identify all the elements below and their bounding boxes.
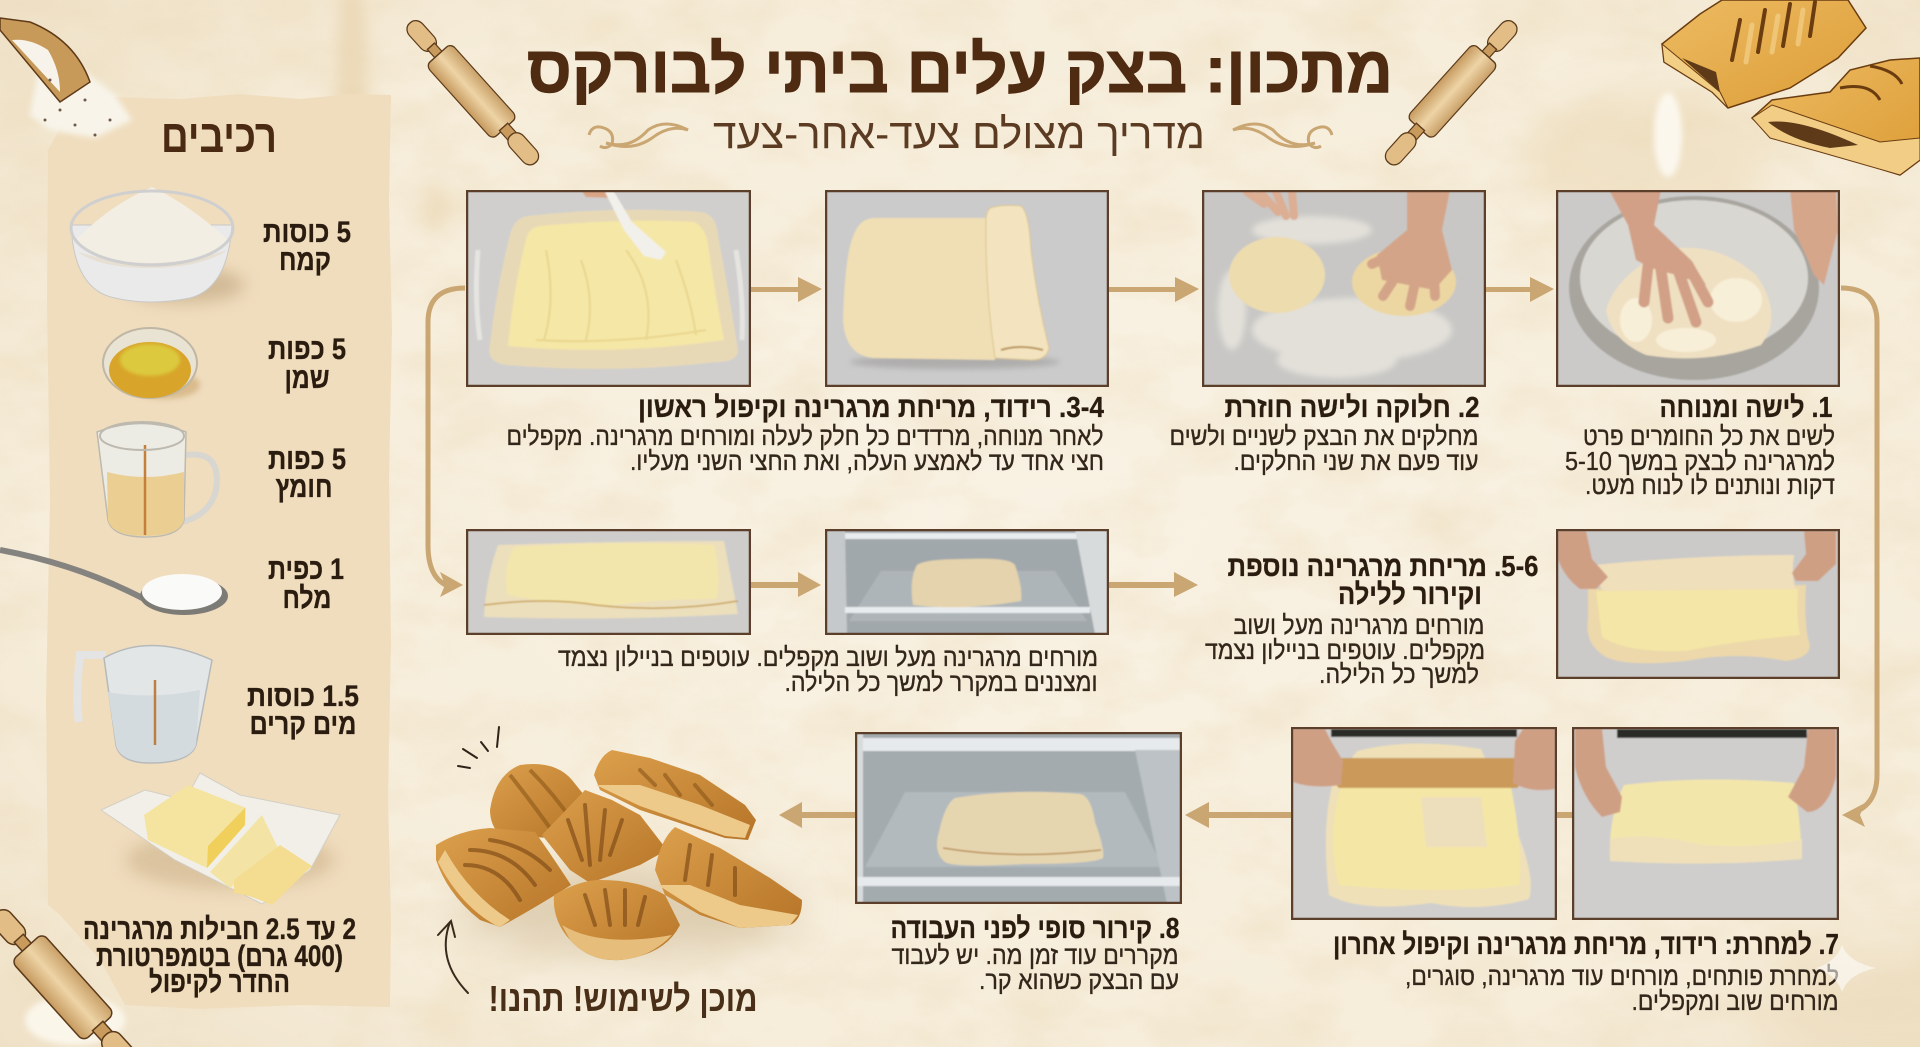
step 8 text bbox=[890, 913, 1180, 995]
step 1 text: דקות ונותנים לו לנוח מעט. bbox=[1585, 470, 1835, 500]
ingredient: vinegar bbox=[97, 422, 346, 537]
photo: step 3-4 spreading margarine bbox=[466, 190, 751, 387]
photo: step 2 dividing dough bbox=[1202, 190, 1486, 387]
connector: step 3 to step 5-6 bbox=[428, 288, 465, 597]
ingredient: oil: 5 כפות bbox=[268, 333, 346, 366]
panel: ingredients bbox=[0, 94, 392, 1009]
ingredient: margarine: (400 גרם) בטמפרטורת bbox=[96, 940, 343, 973]
ingredient: vinegar: חומץ bbox=[276, 471, 332, 504]
ingredient: salt: מלח bbox=[282, 582, 332, 615]
step 5-6 text: 5-6. מריחת מרגרינה נוספת bbox=[1228, 551, 1538, 583]
step 1 text: לשים את כל החומרים פרט bbox=[1583, 421, 1835, 451]
arrow: row 2 first bbox=[751, 572, 821, 597]
flourish left bbox=[589, 124, 688, 148]
ingredient: water: 1.5 כוסות bbox=[247, 680, 359, 713]
photo: step 7 folding bbox=[1572, 727, 1839, 920]
photo: step 5-6 folding over bbox=[1556, 529, 1840, 679]
step 3-4 text: לאחר מנוחה, מרדדים כל חלק לעלה ומורחים מרגרינה. מקפלים bbox=[506, 421, 1104, 451]
step 5-6 caption: ומצננים במקרר למשך כל הלילה. bbox=[784, 667, 1098, 697]
ingredient: margarine: החדר לקיפול bbox=[149, 966, 290, 999]
step 5-6 text: מקפלים. עוטפים בניילון נצמד bbox=[1205, 635, 1485, 665]
connector: step 1 to step 5 bbox=[1841, 288, 1877, 827]
ingredient: water bbox=[77, 645, 359, 763]
ingredient: salt: 1 כפית bbox=[268, 553, 344, 586]
arrow: fridge to pastries bbox=[779, 802, 855, 828]
step 5-6 text bbox=[1205, 551, 1538, 689]
step 3-4 text: 3-4. רידוד, מריחת מרגרינה וקיפול ראשון bbox=[638, 392, 1104, 424]
step 7 text: מורחים שוב ומקפלים. bbox=[1632, 986, 1838, 1016]
step 1 text: 1. לישה ומנוחה bbox=[1660, 392, 1832, 424]
illustration: pastries top right bbox=[1661, 0, 1920, 176]
step 3-4 text bbox=[506, 392, 1104, 476]
arrows bbox=[428, 277, 1877, 828]
title: מתכון: בצק עלים ביתי לבורקס bbox=[527, 32, 1393, 106]
arrow: step 2 to step 1 bbox=[1486, 277, 1554, 302]
arrow: row 2 second bbox=[1108, 572, 1198, 597]
step 2 text: עוד פעם את שני החלקים. bbox=[1234, 446, 1478, 476]
ingredient: margarine: 2 עד 2.5 חבילות מרגרינה bbox=[83, 913, 356, 946]
step 2 text bbox=[1170, 392, 1480, 476]
panel background bbox=[46, 94, 392, 1009]
icon: rolling pin bottom left bbox=[0, 909, 132, 1047]
step 2 text: מחלקים את הבצק לשניים ולשים bbox=[1170, 421, 1478, 451]
step 5-6 text: למשך כל הלילה. bbox=[1319, 659, 1479, 689]
subtitle: מדריך מצולם צעד-אחר-צעד bbox=[713, 110, 1205, 157]
photo: step 5-6 fridge bbox=[825, 529, 1109, 635]
step 1 text: למרגרינה לבצק במשך 5-10 bbox=[1565, 446, 1835, 476]
ingredient: flour: קמח bbox=[279, 244, 331, 277]
ingredient: vinegar: 5 כפות bbox=[268, 443, 346, 476]
step 7 text bbox=[1333, 929, 1839, 1016]
ingredient: flour bbox=[71, 187, 351, 303]
step 8 text: עם הבצק כשהוא קר. bbox=[979, 965, 1179, 995]
heading: ingredients: רכיבים bbox=[161, 110, 277, 162]
step 2 text: 2. חלוקה ולישה חוזרת bbox=[1224, 392, 1480, 424]
arrow: stub bbox=[1556, 812, 1573, 818]
arrow: fold to step 2 bbox=[1108, 277, 1199, 302]
photo: step 3-4 folding bbox=[825, 190, 1109, 387]
step 5-6 caption: מורחים מרגרינה מעל ושוב מקפלים. עוטפים בניילון נצמד bbox=[558, 642, 1098, 672]
arrow: step 3-4 to fold bbox=[751, 277, 822, 302]
step 8 text: 8. קירור סופי לפני העבודה bbox=[890, 913, 1180, 945]
arrow: rolling to fridge bbox=[1185, 802, 1291, 828]
step 8 text: מקררים עוד זמן מה. יש לעבוד bbox=[892, 940, 1178, 970]
icon: rolling pin left bbox=[398, 12, 548, 174]
photo: step 7 rolling bbox=[1291, 727, 1557, 920]
step 7 text: 7. למחרת: רידוד, מריחת מרגרינה וקיפול אחרון bbox=[1333, 929, 1839, 961]
photo: step 5-6 spreading bbox=[466, 529, 751, 635]
flourish right bbox=[1233, 124, 1332, 148]
ingredient: salt bbox=[0, 550, 344, 615]
sparkle lines bbox=[458, 727, 499, 768]
step 5-6 caption bbox=[558, 642, 1098, 697]
ingredient: oil: שמן bbox=[284, 362, 330, 395]
finished pastries bbox=[436, 750, 802, 960]
step 1 text bbox=[1565, 392, 1835, 500]
photo: step 8 fridge bbox=[855, 732, 1182, 904]
ingredient: oil bbox=[103, 328, 346, 399]
icon: sparkle bbox=[1816, 945, 1876, 992]
step 7 text: למחרת פותחים, מורחים עוד מרגרינה, סוגרים, bbox=[1405, 961, 1839, 991]
ingredient: water: מים קרים bbox=[250, 708, 356, 741]
ingredient: flour: 5 כוסות bbox=[263, 216, 351, 249]
step 3-4 text: חצי אחד עד לאמצע העלה, ואת החצי השני מעליו. bbox=[630, 446, 1104, 476]
icon: flour scoop top left bbox=[0, 18, 132, 138]
step 5-6 text: וקירור ללילה bbox=[1338, 579, 1482, 611]
ready to serve caption: מוכן לשימוש! תהנו! bbox=[488, 978, 758, 1019]
ingredient: margarine bbox=[83, 773, 356, 999]
icon: rolling pin right bbox=[1376, 12, 1526, 174]
photo: step 1 kneading bbox=[1556, 190, 1840, 387]
curved arrow bbox=[438, 921, 468, 993]
step 5-6 text: מורחים מרגרינה מעל ושוב bbox=[1234, 610, 1484, 640]
